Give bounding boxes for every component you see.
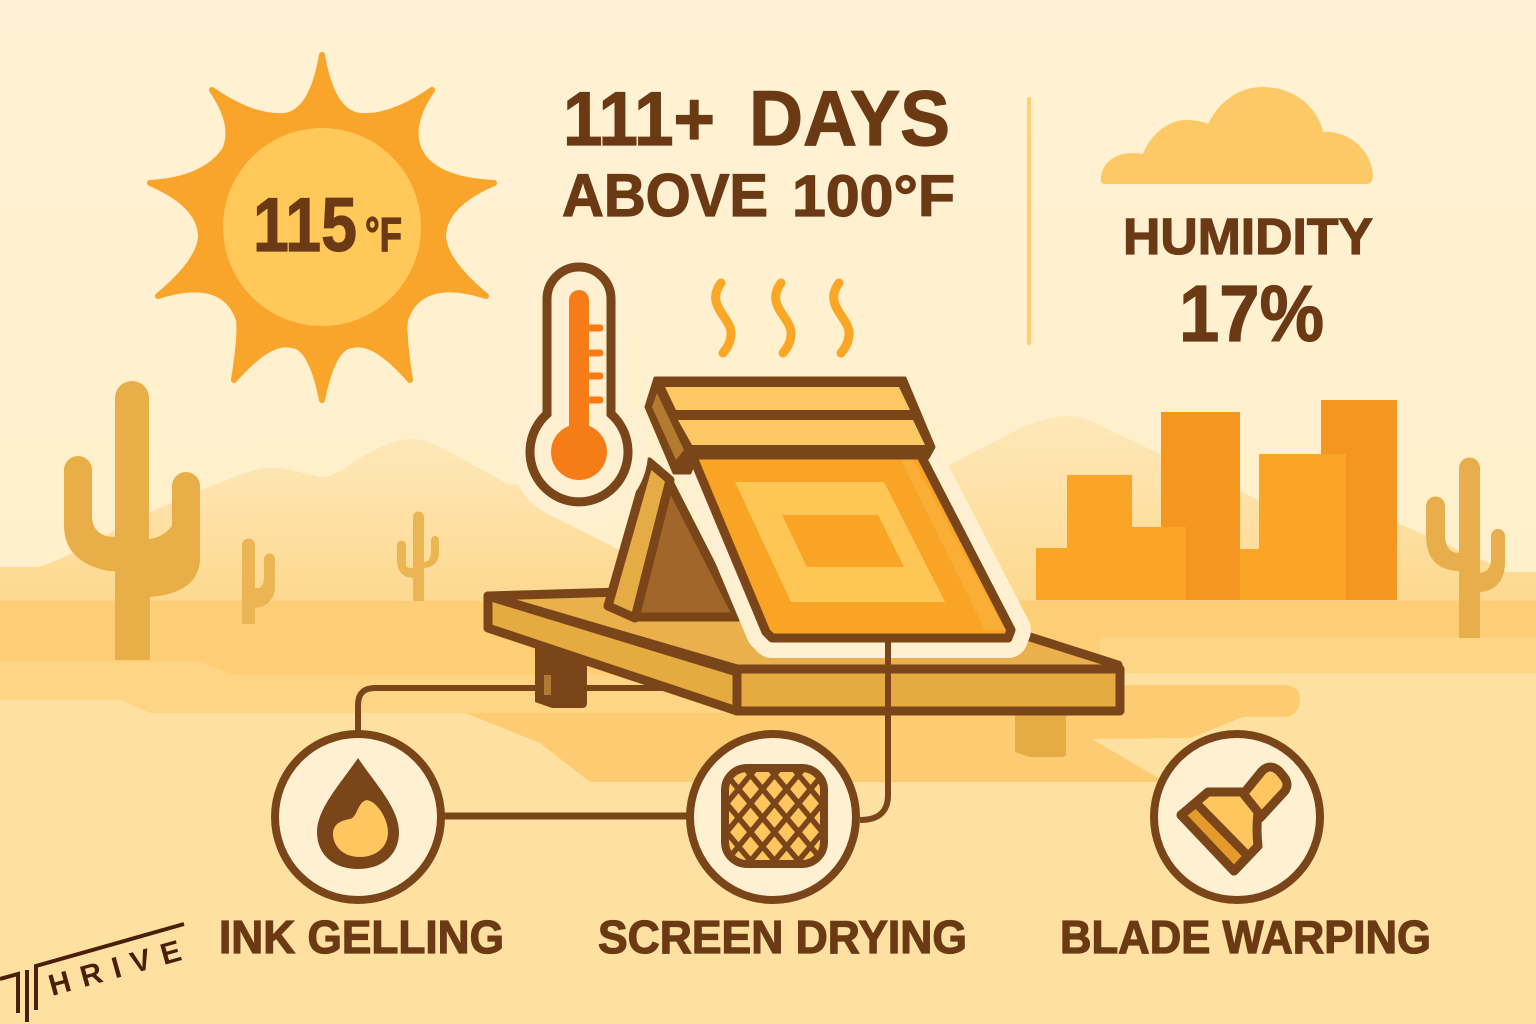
headline days <box>562 74 955 229</box>
screen clamp bar <box>646 378 934 473</box>
small cactus one <box>242 538 275 624</box>
heat waves <box>716 283 849 353</box>
connector wire from table to ink gelling <box>358 688 680 735</box>
work table <box>488 592 1120 711</box>
vertical connector wire to screen drying <box>860 640 888 820</box>
blade warping icon <box>1154 734 1320 900</box>
vertical divider <box>1027 97 1031 345</box>
right mountains <box>930 416 1536 602</box>
sun temperature unit: °F <box>365 209 402 262</box>
headline days: DAYS <box>749 74 950 162</box>
humidity value: 17% <box>1179 269 1324 358</box>
blade warping label: BLADE WARPING <box>1060 911 1431 963</box>
screen frame <box>690 450 1011 638</box>
ink gelling label: INK GELLING <box>219 911 504 963</box>
left mountains <box>0 439 660 602</box>
table rear post <box>1015 700 1066 757</box>
thermometer icon <box>530 267 628 502</box>
connector line between ink and screen icons <box>440 812 695 820</box>
headline days: 100°F <box>792 164 955 229</box>
screen drying label: SCREEN DRYING <box>598 911 967 963</box>
sun <box>150 55 494 400</box>
screen print window <box>782 515 904 567</box>
headline days: 111+ <box>563 77 715 162</box>
right cactus <box>1426 458 1505 638</box>
sand shadow <box>465 685 1300 782</box>
headline days: ABOVE <box>562 162 768 229</box>
cloud icon <box>1101 87 1373 184</box>
ink gelling icon <box>275 734 441 900</box>
thrive logo: HRIVE <box>45 935 185 1003</box>
table leg <box>535 640 587 708</box>
screen drying icon <box>686 730 860 904</box>
city buildings <box>1036 400 1397 600</box>
screen emulsion area <box>735 482 945 602</box>
thrive logo <box>0 924 185 1022</box>
large cactus left <box>64 381 200 660</box>
humidity label: HUMIDITY <box>1123 208 1373 265</box>
lower sand band <box>0 630 1536 713</box>
upper sand band <box>0 601 1536 675</box>
sun temperature: 115 <box>253 183 357 268</box>
a-frame support <box>608 462 738 618</box>
small cactus two <box>397 512 439 601</box>
thermometer and screen halo <box>530 267 1011 638</box>
